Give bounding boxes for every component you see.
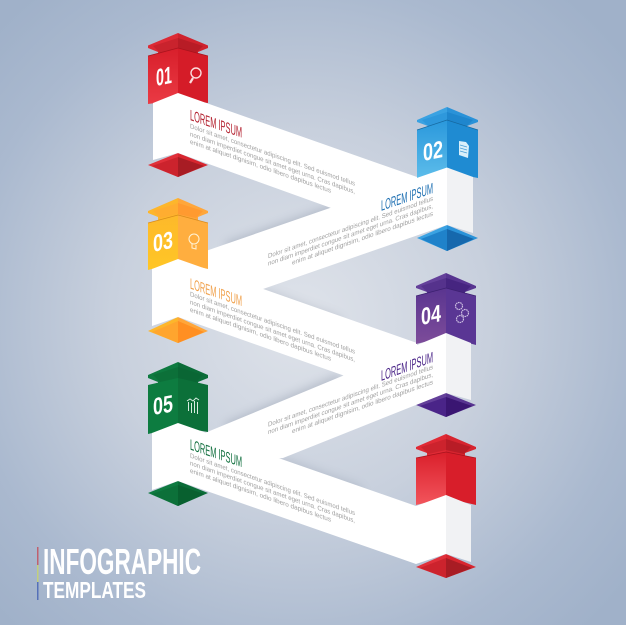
top cap 02: [417, 107, 478, 130]
bottom cap 01: [148, 153, 208, 177]
band 03: [152, 259, 417, 392]
band 02: [200, 168, 473, 290]
band 05: [152, 423, 471, 564]
band 04: [200, 333, 471, 465]
box face 03: [148, 215, 208, 270]
module 05: green box: [148, 362, 208, 506]
text block 02: LOREM IPSUM: [381, 180, 433, 215]
text block 03: LOREM IPSUM: [190, 276, 242, 310]
icon: magnifier: [190, 68, 201, 83]
icon: light bulb: [189, 234, 199, 249]
shadows in gaps between bands: [225, 205, 365, 499]
top cap 01: [148, 33, 208, 56]
icon: document: [459, 141, 469, 158]
icon: bar chart: [187, 398, 199, 414]
number 05: 05: [153, 391, 173, 421]
subtitle: templates: TEMPLATES: [43, 577, 146, 603]
top cap 06: [416, 434, 476, 458]
text block 04: LOREM IPSUM: [381, 349, 433, 385]
text block 01: Dolor sit amet, consectetur adipiscing elit. Sed euismod tellus: [190, 123, 356, 188]
title block: [37, 541, 201, 603]
bottom cap 05: [148, 481, 208, 506]
text block 04: enim at aliquet dignisim, odio libero dapibus lectus: [292, 379, 434, 435]
module 02: blue box: [417, 107, 478, 251]
bottom cap 04: [416, 393, 476, 417]
title: infographic: INFOGRAPHIC: [43, 541, 201, 582]
module 04: purple box: [416, 273, 476, 417]
text block 05: non diam imperdiet congue sit amet eget urna. Cras dapibus,: [190, 460, 355, 525]
text block 03: enim at aliquet dignisim, odio libero dapibus lectus: [190, 307, 332, 363]
text block 02: Dolor sit amet, consectetur adipiscing elit. Sed euismod tellus: [268, 195, 434, 260]
number 03: 03: [153, 227, 173, 258]
box face 06: [416, 452, 476, 505]
text block 02: non diam imperdiet congue sit amet eget urna. Cras dapibus,: [268, 203, 433, 268]
text block 05: enim at aliquet dignisim, odio libero dapibus lectus: [190, 468, 332, 524]
right face 04: [446, 333, 471, 400]
top cap 05: [148, 362, 208, 386]
title accent bar: [37, 547, 38, 600]
right face 05: [446, 495, 471, 562]
module 06: red end box: [416, 434, 476, 578]
text block 01: enim at aliquet dignisim, odio libero dapibus lectus: [190, 139, 332, 195]
number 01: 01: [156, 62, 172, 92]
text block 04: non diam imperdiet congue sit amet eget urna. Cras dapibus,: [268, 372, 433, 436]
box face 01: [148, 48, 208, 104]
bottom cap 02: [417, 225, 478, 251]
text block 03: non diam imperdiet congue sit amet eget urna. Cras dapibus,: [190, 299, 355, 364]
text block 05: LOREM IPSUM: [190, 437, 242, 471]
module 03: yellow box: [148, 198, 208, 343]
box face 02: [417, 120, 478, 178]
text block 03: Dolor sit amet, consectetur adipiscing elit. Sed euismod tellus: [190, 291, 356, 356]
text block 05: Dolor sit amet, consectetur adipiscing elit. Sed euismod tellus: [190, 453, 356, 517]
text block 04: Dolor sit amet, consectetur adipiscing elit. Sed euismod tellus: [268, 364, 434, 429]
box face 05: [148, 378, 208, 434]
top cap 03: [148, 198, 208, 221]
top cap 04: [416, 273, 476, 296]
text block 01: LOREM IPSUM: [190, 107, 242, 142]
text block 02: enim at aliquet dignisim, odio libero dapibus lectus: [292, 210, 434, 267]
bottom cap 06: [416, 554, 476, 578]
number 02: 02: [423, 136, 443, 167]
text block 01: non diam imperdiet congue sit amet eget urna. Cras dapibus,: [190, 131, 355, 196]
module 01: red box: [148, 33, 208, 177]
band 01: [153, 93, 417, 225]
icon: gears: [456, 302, 468, 322]
right face 02: [447, 168, 473, 233]
box face 04: [416, 288, 476, 345]
number 04: 04: [421, 300, 441, 331]
bottom cap 03: [148, 317, 208, 343]
